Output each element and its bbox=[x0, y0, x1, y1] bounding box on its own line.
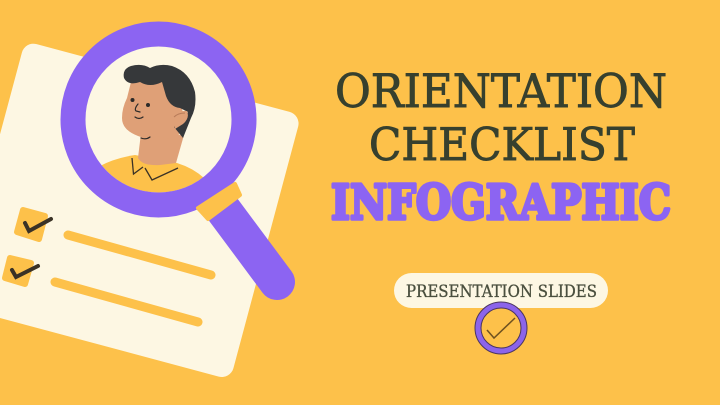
neck bbox=[138, 133, 184, 165]
collar bbox=[132, 158, 178, 180]
magnifier lens interior bbox=[78, 40, 238, 200]
subtitle pill: PRESENTATION SLIDES bbox=[406, 282, 597, 302]
panel: checklist document bbox=[0, 41, 301, 380]
ear bbox=[173, 111, 188, 129]
icon: checked box 1 bbox=[17, 210, 51, 239]
magnifier ring bbox=[73, 34, 244, 205]
shirt bbox=[102, 155, 203, 192]
icon: magnifying glass bbox=[73, 34, 277, 282]
hair bbox=[124, 65, 196, 138]
title line 2: CHECKLIST bbox=[369, 118, 635, 171]
title line 1: ORIENTATION bbox=[335, 64, 667, 118]
face bbox=[122, 82, 182, 137]
magnifier handle bbox=[222, 208, 277, 282]
nose and mouth bbox=[135, 104, 150, 139]
icon: circled check bbox=[475, 302, 527, 354]
icon: checked box 2 bbox=[5, 258, 38, 284]
person portrait bbox=[100, 65, 204, 200]
magnifier collar bbox=[198, 184, 240, 219]
checklist line 1 bbox=[68, 235, 211, 275]
subtitle pill bbox=[394, 273, 608, 308]
checklist line 2 bbox=[55, 282, 198, 322]
title bbox=[331, 64, 671, 231]
eyes bbox=[130, 98, 134, 102]
